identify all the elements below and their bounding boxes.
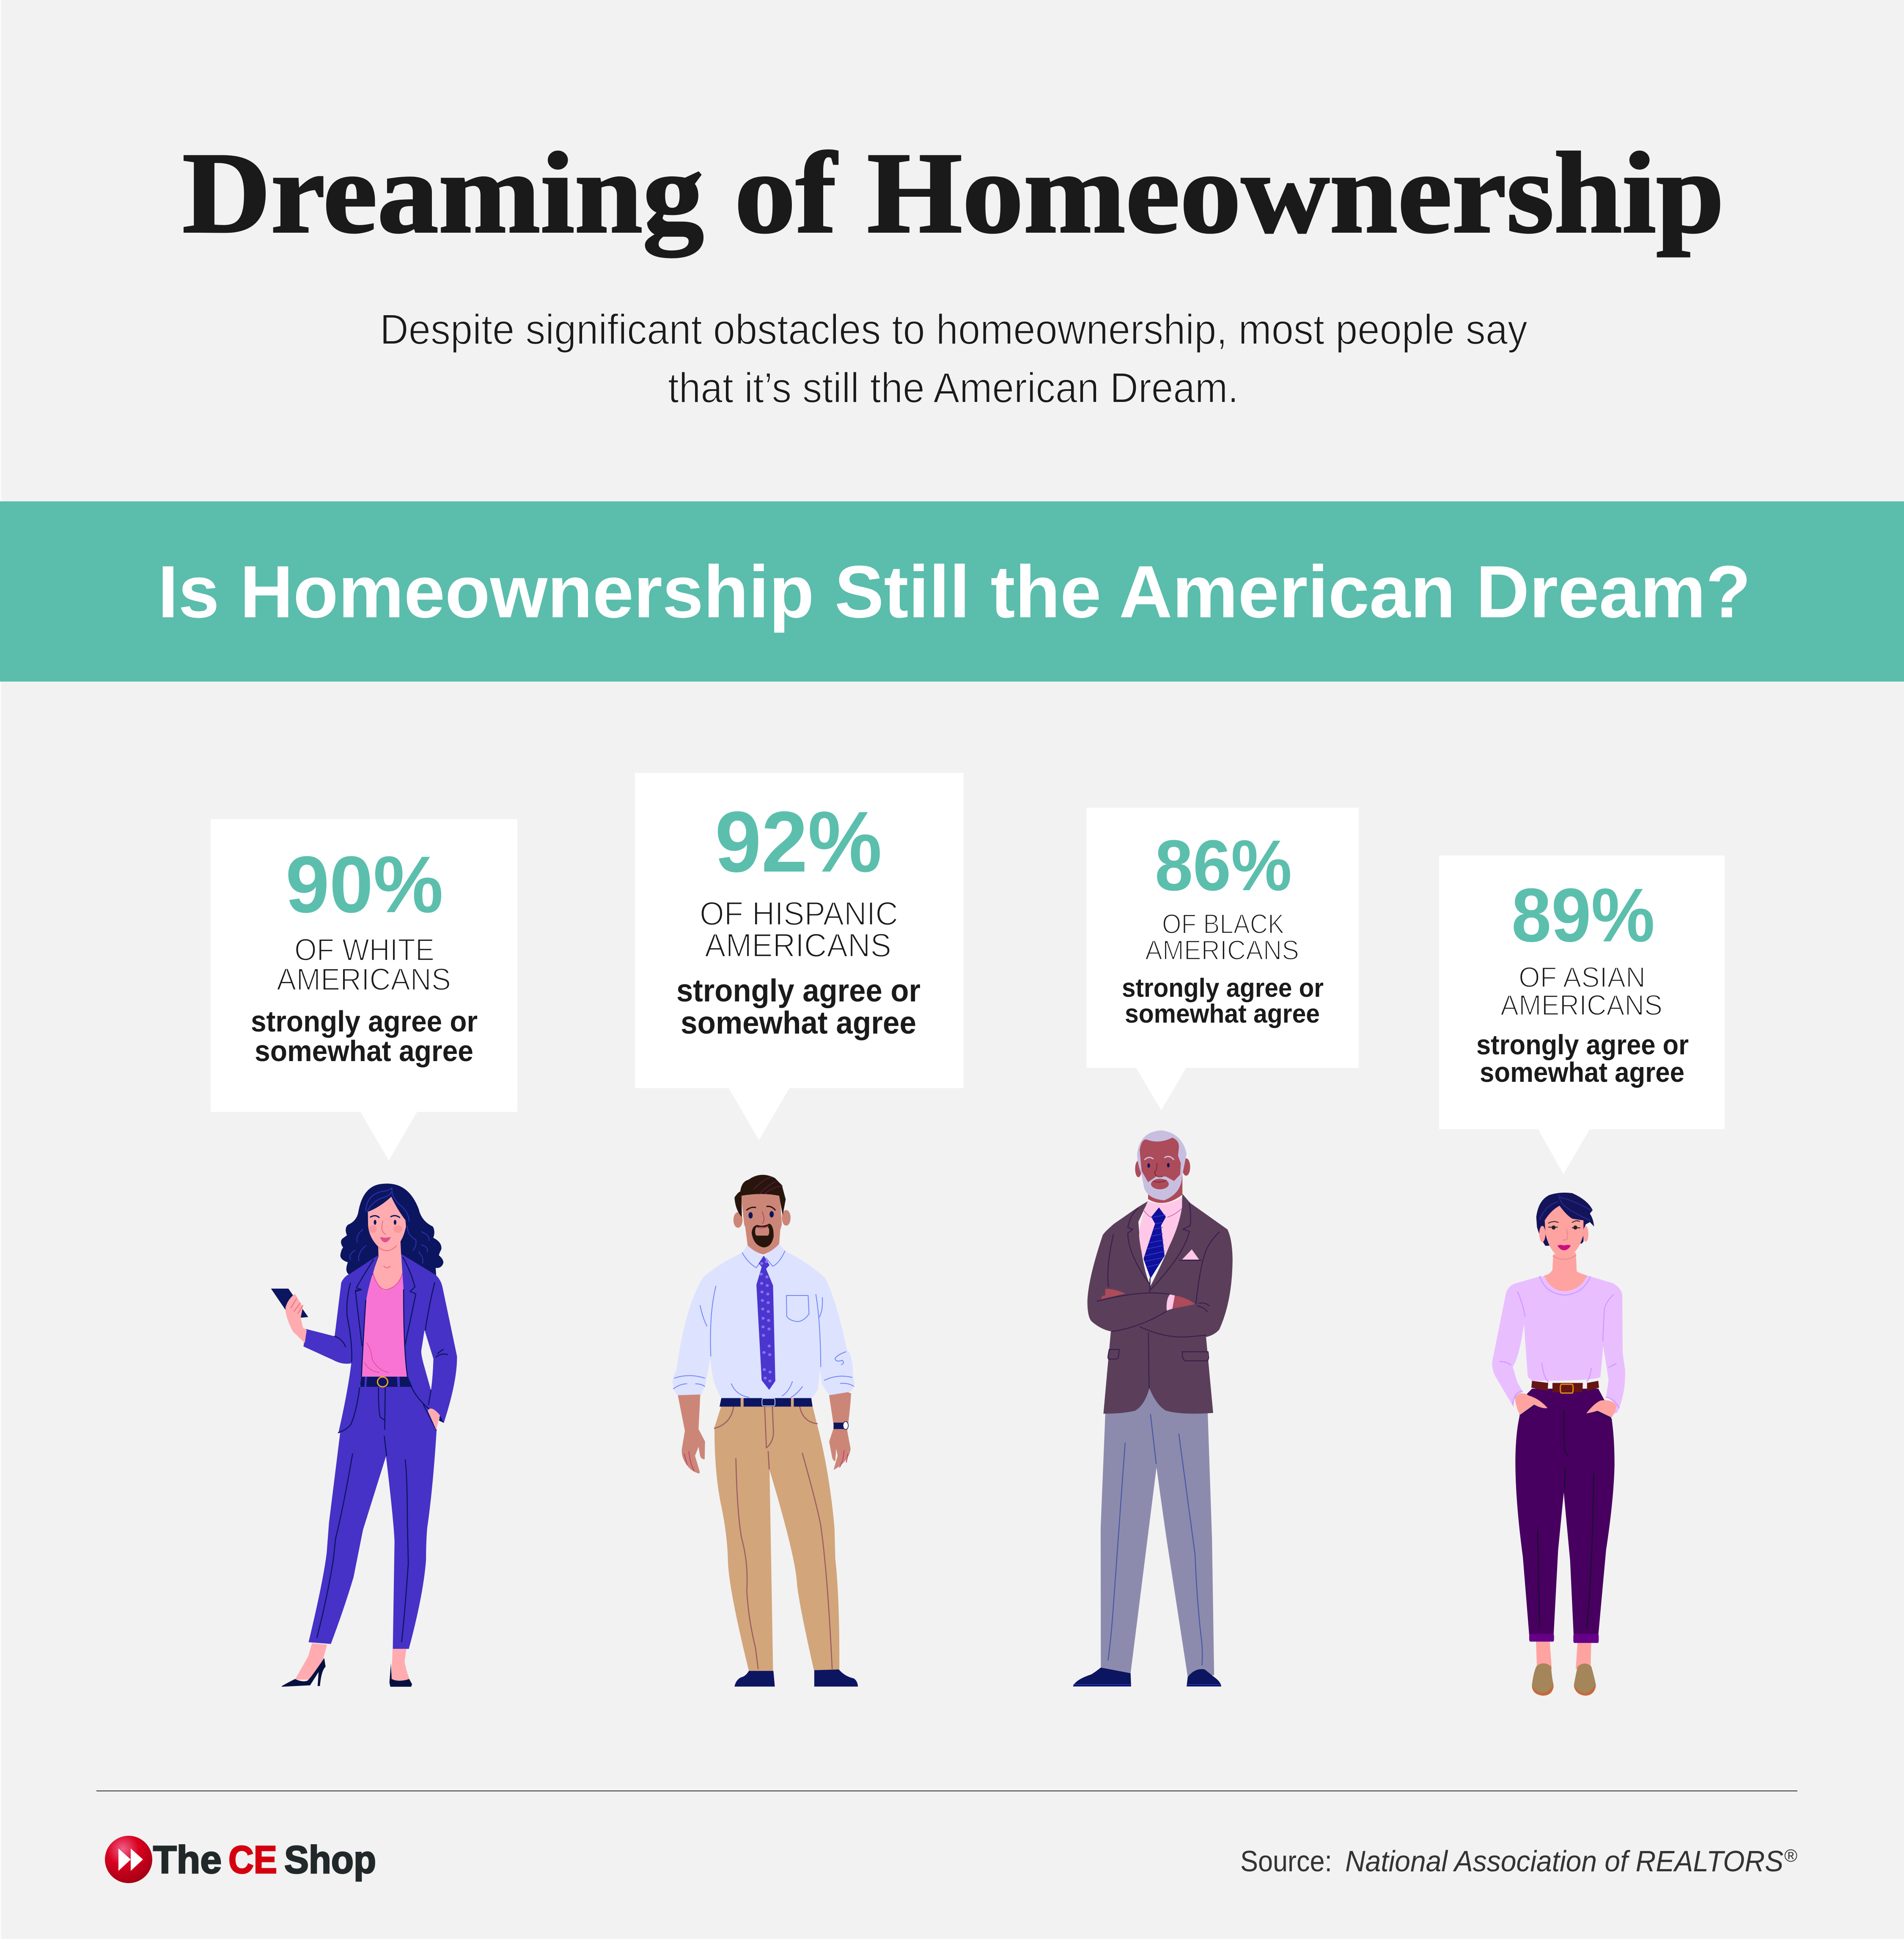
- callout: white Americans 90%: [211, 819, 517, 1161]
- shoes: [1073, 1667, 1221, 1686]
- hands in pockets: [1515, 1393, 1617, 1419]
- neck: [1544, 1253, 1587, 1291]
- agreement text: somewhat agree: [255, 1034, 473, 1067]
- trouser seams: [714, 1407, 832, 1669]
- face: [1140, 1138, 1181, 1182]
- phone: [271, 1289, 308, 1318]
- figure: man with beard in shirt and tie: [673, 1175, 858, 1686]
- agreement text: [1476, 1029, 1689, 1088]
- facial features: [1147, 1163, 1150, 1168]
- source text: Source:: [1240, 1845, 1332, 1878]
- agreement text: strongly agree or: [676, 973, 920, 1008]
- title: Dreaming of Homeownership: [182, 129, 1724, 259]
- jacket: [1088, 1194, 1233, 1414]
- group label: AMERICANS: [277, 963, 451, 997]
- belt: [1531, 1381, 1599, 1393]
- suit seams: [317, 1257, 448, 1642]
- agreement text: somewhat agree: [1125, 999, 1320, 1029]
- shirt: [1139, 1197, 1182, 1279]
- neck and chest: [373, 1239, 403, 1290]
- figure: woman in purple suit holding phone: [271, 1183, 457, 1687]
- face details: [369, 1216, 402, 1268]
- head: [734, 1175, 791, 1254]
- group label: OF HISPANIC: [700, 895, 898, 932]
- agreement text: strongly agree or: [251, 1005, 478, 1038]
- hands and cuff: [1101, 1289, 1195, 1311]
- beard: [752, 1224, 774, 1247]
- stat: 90%: 90%: [286, 840, 443, 930]
- head: [1536, 1193, 1594, 1260]
- hair strands: [350, 1188, 429, 1263]
- figure: woman with short hair in lilac sweater: [1492, 1193, 1625, 1696]
- subtitle text: that it’s still the American Dream.: [668, 364, 1239, 412]
- banner: question: [0, 501, 1904, 682]
- callout: Hispanic Americans 92%: [635, 773, 964, 1140]
- hair: [734, 1175, 786, 1217]
- trouser seams: [1538, 1411, 1594, 1628]
- subtitle text: Despite significant obstacles to homeownership, most people say: [380, 306, 1528, 353]
- neck: [1148, 1173, 1182, 1203]
- arms: [678, 1391, 851, 1474]
- group label: [1145, 908, 1299, 965]
- pink top: [361, 1273, 408, 1377]
- ears and face: [1539, 1226, 1545, 1242]
- face: [368, 1197, 406, 1250]
- trouser seams: [1108, 1414, 1202, 1665]
- agreement text: somewhat agree: [1480, 1056, 1684, 1088]
- trousers: [714, 1406, 839, 1671]
- shirt: [673, 1244, 854, 1398]
- hand in pocket: [428, 1408, 440, 1430]
- left leg and heel: [282, 1643, 327, 1687]
- necktie: [756, 1256, 775, 1390]
- logo wordmark: [153, 1838, 376, 1881]
- group label: OF BLACK: [1162, 908, 1284, 939]
- agreement text: somewhat agree: [681, 1005, 916, 1040]
- logo wordmark: The: [153, 1838, 222, 1881]
- logo icon: [105, 1836, 152, 1883]
- hand holding phone: [286, 1294, 307, 1343]
- group label: OF WHITE: [294, 933, 434, 967]
- banner heading: Is Homeownership Still the American Dream?: [158, 551, 1751, 633]
- belt: [360, 1377, 412, 1387]
- callout: Black Americans 86%: [1087, 808, 1359, 1110]
- logo wordmark: Shop: [284, 1838, 376, 1881]
- belt: [720, 1398, 813, 1407]
- facial features: [748, 1212, 753, 1218]
- watch: [834, 1422, 848, 1430]
- agreement text: [1122, 974, 1324, 1029]
- group label: [277, 933, 451, 997]
- trousers: [1101, 1373, 1214, 1677]
- right leg and shoe: [390, 1649, 412, 1687]
- figure: older man with grey beard in blazer, arms crossed: [1073, 1130, 1233, 1686]
- divider line: [96, 1790, 1797, 1791]
- head: [1135, 1130, 1190, 1200]
- agreement text: [676, 973, 920, 1040]
- gap between arm and body: [421, 1330, 434, 1390]
- source text: ®: [1784, 1845, 1797, 1865]
- group label: AMERICANS: [1145, 935, 1299, 965]
- sweater seams: [1500, 1276, 1619, 1408]
- group label: OF ASIAN: [1519, 961, 1646, 993]
- collar: [1143, 1209, 1181, 1217]
- stat: 92%: 92%: [715, 794, 882, 890]
- group label: [1500, 961, 1662, 1021]
- trouser cuffs: [1529, 1634, 1599, 1643]
- facial features: [1549, 1221, 1580, 1228]
- stat: 86%: 86%: [1155, 825, 1292, 906]
- stat: 89%: 89%: [1511, 873, 1655, 958]
- callout: Asian Americans 89%: [1439, 855, 1725, 1174]
- group label: AMERICANS: [1500, 989, 1662, 1021]
- source text: National Association of REALTORS: [1345, 1845, 1783, 1878]
- sweater: [1492, 1276, 1625, 1414]
- logo wordmark: CE: [228, 1838, 277, 1881]
- shoes: [734, 1669, 858, 1686]
- ankles: [1536, 1640, 1591, 1669]
- group label: AMERICANS: [705, 927, 891, 964]
- logo: The CE Shop: [105, 1836, 376, 1883]
- agreement text: [251, 1005, 478, 1067]
- necktie: [1143, 1207, 1166, 1279]
- lapels and seams: [1097, 1203, 1219, 1388]
- pocket square: [1182, 1249, 1199, 1260]
- shoes: [1532, 1663, 1596, 1696]
- hair: [1536, 1193, 1594, 1246]
- shirt folds and pocket: [673, 1251, 854, 1397]
- hair: [340, 1183, 443, 1276]
- trousers: [308, 1386, 437, 1649]
- trousers: [1515, 1389, 1615, 1635]
- agreement text: strongly agree or: [1122, 974, 1324, 1003]
- jacket: [303, 1255, 378, 1433]
- subtitle text: [380, 306, 1528, 412]
- grey hair and beard: [1137, 1130, 1187, 1200]
- group label: [700, 895, 898, 964]
- agreement text: strongly agree or: [1476, 1029, 1689, 1060]
